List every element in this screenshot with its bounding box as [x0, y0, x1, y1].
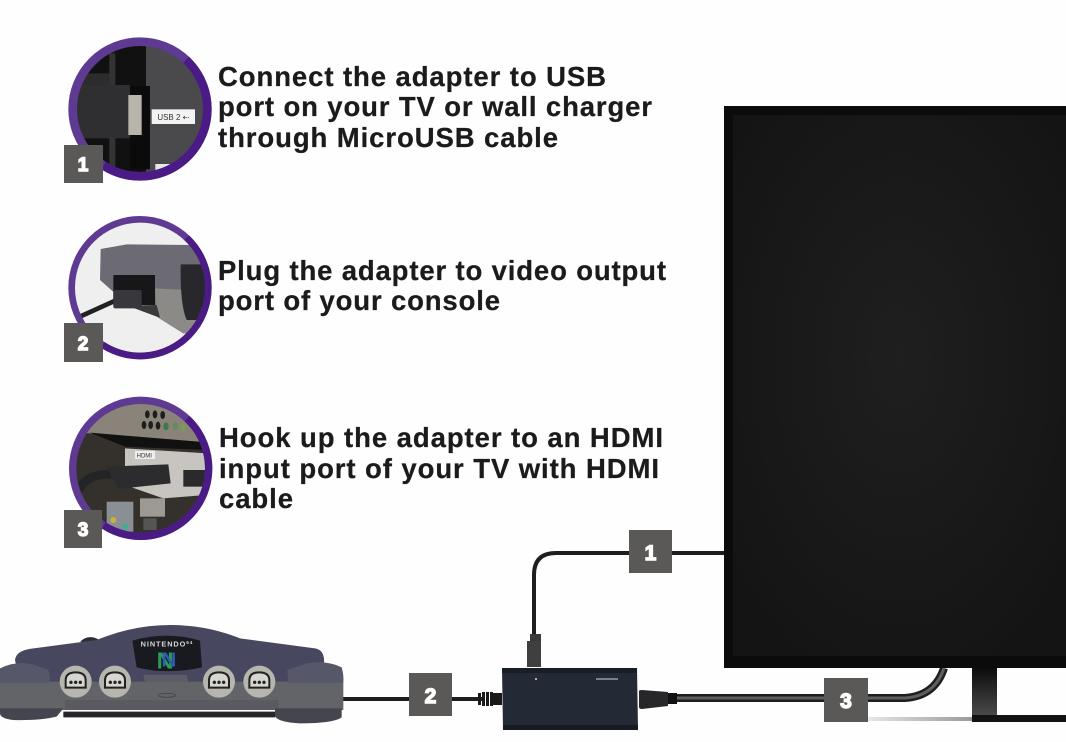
step 1 badge [64, 145, 103, 183]
Nintendo 64 console: N [157, 647, 174, 673]
step 1 instruction text: port on your TV or wall charger [218, 91, 652, 122]
step 1 instruction text [218, 61, 652, 153]
Nintendo 64 console: 64 [186, 640, 193, 645]
step 3 instruction text: cable [219, 483, 293, 514]
step 1 instruction text: Connect the adapter to USB [218, 61, 606, 92]
step 2 photo: console video port [72, 219, 208, 356]
badge 3 on cable [824, 678, 868, 722]
Nintendo 64 console: N [161, 649, 176, 672]
adapter box [502, 668, 638, 730]
Nintendo 64 console [0, 625, 343, 723]
HDMI plug [639, 690, 677, 709]
step 3 photo: HDMI port: HDMI [137, 454, 152, 460]
badge 2 on cable [409, 673, 452, 716]
step 1 instruction text: through MicroUSB cable [218, 122, 558, 153]
badge 1 on cable: 1 [645, 542, 657, 565]
USB cable [527, 553, 724, 667]
step 3 instruction text: input port of your TV with HDMI [219, 453, 659, 484]
step 3 photo: HDMI port [70, 400, 209, 538]
step 2 instruction text: port of your console [218, 285, 500, 316]
step 1 photo: USB port [70, 40, 207, 180]
step 1 badge: 1 [78, 155, 89, 176]
step 2 instruction text [218, 255, 666, 316]
TV stand [868, 668, 1066, 722]
step 3 badge [64, 510, 102, 548]
video cable [342, 692, 502, 706]
badge 2 on cable: 2 [425, 685, 436, 708]
step 2 badge: 2 [78, 334, 88, 355]
step 2 badge [64, 323, 103, 362]
TV [724, 106, 1066, 668]
Nintendo 64 console: NINTENDO [141, 640, 185, 649]
HDMI cable [670, 668, 944, 698]
badge 3 on cable: 3 [840, 690, 852, 713]
step 1 photo: USB port: USB 2 ⇠ [157, 113, 190, 122]
step 3 instruction text: Hook up the adapter to an HDMI [219, 422, 663, 453]
step 3 badge: 3 [78, 520, 88, 541]
step 3 instruction text [219, 422, 663, 514]
badge 1 on cable [629, 530, 672, 573]
step 2 instruction text: Plug the adapter to video output [218, 255, 666, 286]
